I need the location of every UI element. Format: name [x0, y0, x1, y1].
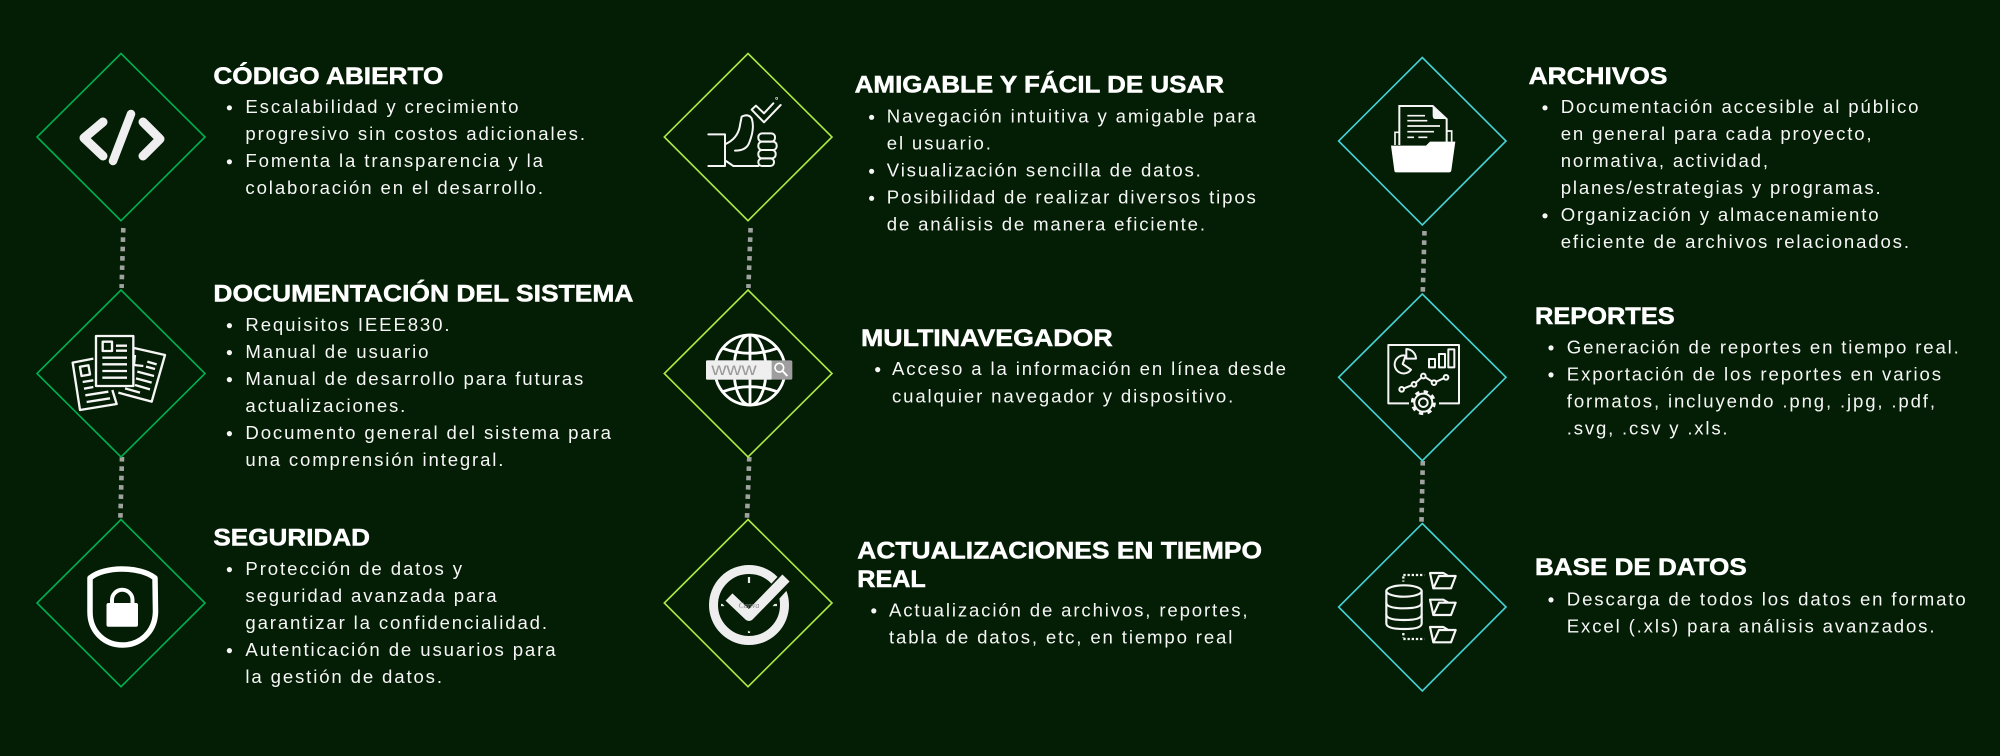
bullet list: [1542, 96, 1918, 252]
bullet list: Excel (.xls) para análisis avanzados.: [1567, 615, 1934, 636]
bullet list: tabla de datos, etc, en tiempo real: [889, 626, 1232, 647]
diamond frame: [37, 54, 205, 221]
bullet list: Documento general del sistema para: [245, 422, 612, 443]
heading: ACTUALIZACIONES EN TIEMPO: [857, 539, 1262, 565]
bullet list: [875, 358, 1286, 406]
bullet list: normativa, actividad,: [1561, 150, 1768, 171]
panel: documentación del sistema: [37, 280, 633, 470]
diamond frame: [664, 290, 832, 457]
bullet list: formatos, incluyendo .png, .jpg, .pdf,: [1567, 390, 1935, 411]
bullet list: Exportación de los reportes en varios: [1567, 363, 1941, 384]
bullet list: una comprensión integral.: [245, 449, 503, 470]
heading: MULTINAVEGADOR: [861, 326, 1113, 352]
bullet list: Visualización sencilla de datos.: [887, 160, 1201, 181]
icon: globe with www search bar: [706, 335, 792, 405]
bullet list: Organización y almacenamiento: [1561, 204, 1879, 225]
bullet list: eficiente de archivos relacionados.: [1561, 231, 1909, 252]
bullet list: [227, 314, 612, 470]
bullet list: [1548, 336, 1959, 438]
bullet list: Posibilidad de realizar diversos tipos: [887, 187, 1256, 208]
icon: code brackets: [84, 114, 160, 161]
bullet list: en general para cada proyecto,: [1561, 123, 1872, 144]
bullet list: Requisitos IEEE830.: [245, 314, 450, 335]
connector: dotted line 2: [1422, 461, 1423, 522]
bullet list: Documentación accesible al público: [1561, 96, 1918, 117]
heading: CÓDIGO ABIERTO: [213, 62, 443, 90]
bullet list: la gestión de datos.: [245, 666, 442, 687]
bullet list: progresivo sin costos adicionales.: [245, 123, 585, 144]
icon: documents: [73, 336, 165, 410]
connector: dotted line 1: [748, 228, 751, 288]
diamond frame: [1339, 524, 1506, 691]
heading: SEGURIDAD: [213, 526, 370, 552]
panel: reportes: [1339, 294, 1959, 461]
bullet list: Escalabilidad y crecimiento: [245, 96, 518, 117]
diamond frame: [664, 520, 832, 687]
heading: REPORTES: [1535, 304, 1675, 330]
heading: ARCHIVOS: [1529, 64, 1667, 90]
bullet list: [1548, 588, 1966, 636]
icon: dashboard with gear: [1388, 345, 1459, 413]
icon: clock with check mark: Canva: [739, 601, 759, 610]
panel: actualizaciones en tiempo real: [664, 520, 1262, 687]
bullet list: Autenticación de usuarios para: [245, 639, 556, 660]
panel: base de datos: [1339, 524, 1966, 691]
bullet list: [227, 558, 556, 687]
heading: AMIGABLE Y FÁCIL DE USAR: [855, 71, 1224, 99]
column 1: open source, documentation, security: [37, 54, 633, 687]
bullet list: Actualización de archivos, reportes,: [889, 599, 1248, 620]
bullet list: Protección de datos y: [245, 558, 463, 579]
connector: dotted line 2: [120, 457, 122, 518]
icon: folder with document: [1391, 106, 1455, 172]
connector: dotted line 1: [122, 228, 123, 288]
bullet list: de análisis de manera eficiente.: [887, 214, 1205, 235]
panel: multinavegador: [664, 290, 1286, 457]
icon: database with folders: [1386, 573, 1456, 642]
icon: clock with check mark: [714, 570, 791, 640]
bullet list: Descarga de todos los datos en formato: [1567, 588, 1966, 609]
diamond frame: [1339, 58, 1506, 225]
bullet list: [871, 599, 1248, 647]
bullet list: el usuario.: [887, 133, 991, 154]
bullet list: actualizaciones.: [245, 395, 405, 416]
bullet list: seguridad avanzada para: [245, 585, 497, 606]
bullet list: Generación de reportes en tiempo real.: [1567, 336, 1959, 357]
bullet list: cualquier navegador y dispositivo.: [892, 385, 1233, 406]
panel: seguridad: [37, 520, 556, 687]
connector: dotted line 2: [747, 457, 749, 518]
heading: REAL: [857, 567, 926, 593]
panel: amigable y fácil de usar: [664, 54, 1256, 235]
connector: dotted line 1: [1423, 231, 1424, 292]
bullet list: planes/estrategias y programas.: [1561, 177, 1881, 198]
bullet list: Manual de usuario: [245, 341, 428, 362]
bullet list: Fomenta la transparencia y la: [245, 150, 544, 171]
diamond frame: [664, 54, 832, 221]
diamond frame: [37, 290, 205, 457]
heading: [857, 539, 1262, 593]
bullet list: Acceso a la información en línea desde: [892, 358, 1286, 379]
panel: código abierto: [37, 54, 585, 221]
bullet list: [227, 96, 585, 198]
column 3: files, reports, database: [1339, 58, 1966, 691]
bullet list: .svg, .csv y .xls.: [1567, 417, 1728, 438]
heading: BASE DE DATOS: [1535, 555, 1747, 581]
icon: thumbs up with check: [708, 98, 781, 166]
icon: shield with padlock: [90, 569, 156, 645]
bullet list: colaboración en el desarrollo.: [245, 177, 543, 198]
bullet list: Manual de desarrollo para futuras: [245, 368, 583, 389]
bullet list: garantizar la confidencialidad.: [245, 612, 547, 633]
diamond frame: [1339, 294, 1506, 461]
diamond frame: [37, 520, 205, 687]
panel: archivos: [1339, 58, 1918, 252]
column 2: usability, multi-browser, real time: [664, 54, 1286, 687]
icon: globe with www search bar: www: [710, 359, 757, 379]
heading: DOCUMENTACIÓN DEL SISTEMA: [213, 280, 633, 308]
bullet list: [869, 106, 1256, 235]
bullet list: Navegación intuitiva y amigable para: [887, 106, 1256, 127]
